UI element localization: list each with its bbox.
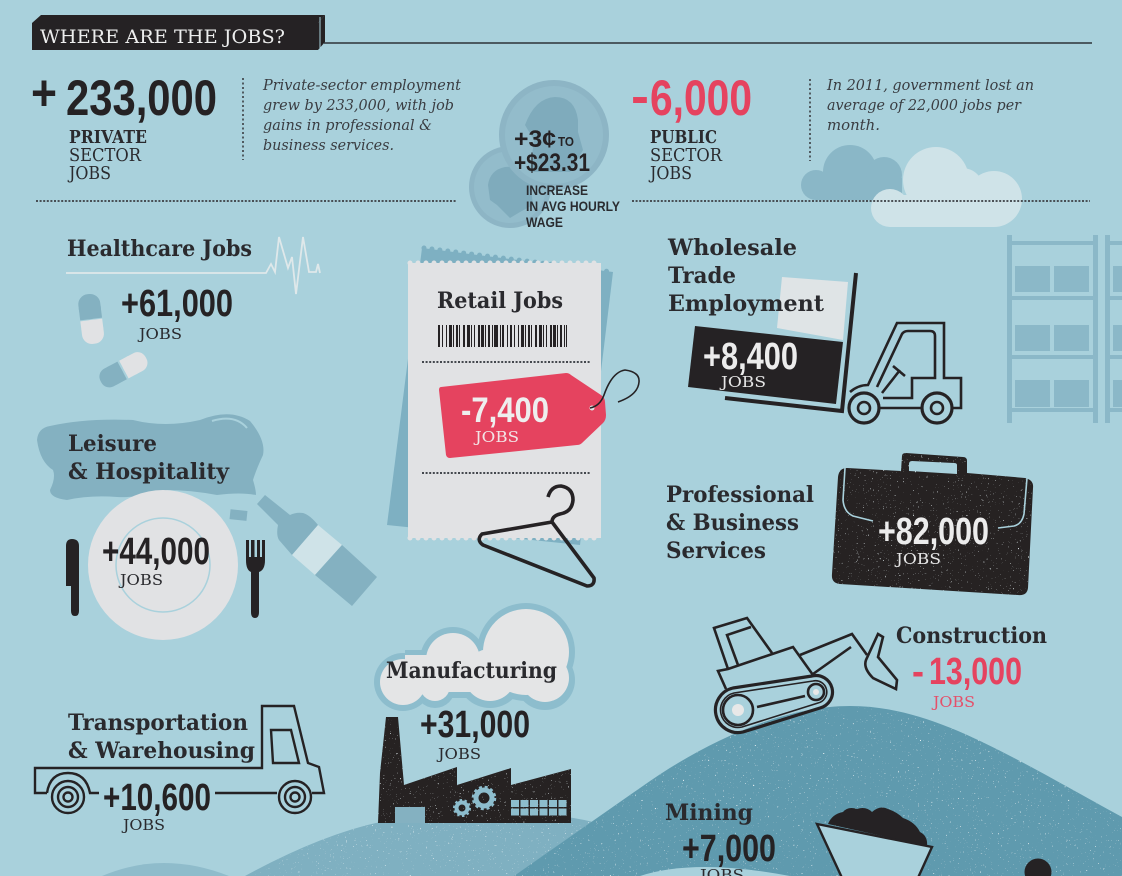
panel: leisure and hospitality [37, 414, 377, 640]
text: private sector description: gains in professional & [263, 118, 432, 134]
panel: retail: Retail Jobs [437, 288, 563, 314]
panel: professional and business services: Services [666, 538, 766, 564]
panel: mining: Mining [665, 800, 753, 826]
panel: wholesale trade: Employment [668, 291, 825, 317]
text: private sector description: grew by 233,000, with job [263, 98, 454, 114]
icon: light cloud [871, 147, 1022, 227]
panel: manufacturing: JOBS [436, 745, 481, 763]
panel: manufacturing [374, 603, 575, 823]
panel: transportation and warehousing: +10,600 [103, 777, 211, 819]
panel: manufacturing: +31,000 [420, 704, 530, 746]
icon: miner head [1024, 858, 1052, 876]
hill: light foreground [640, 867, 790, 876]
panel: construction: 13,000 [929, 651, 1022, 693]
title banner [32, 15, 325, 50]
text: public sector description: average of 22,000 jobs per [827, 98, 1022, 114]
text: private sector description: Private-sector employment [262, 78, 461, 94]
stat: private sector jobs: + [31, 65, 57, 121]
text: public sector description [826, 78, 1034, 134]
stat: public sector jobs [631, 68, 752, 184]
panel: wholesale trade: JOBS [719, 373, 766, 391]
panel: leisure and hospitality: & Hospitality [68, 459, 230, 485]
panel: healthcare [66, 236, 320, 391]
text: private sector description: business services. [263, 138, 394, 154]
icon: coins with wage increase: TO [558, 134, 574, 149]
icon: coins with wage increase: INCREASE [526, 182, 588, 198]
text: public sector description: month. [827, 118, 880, 134]
hill: small bottom left [102, 863, 229, 876]
panel: wholesale trade: Wholesale [667, 235, 797, 261]
panel: professional and business services: & Business [666, 510, 799, 536]
panel: mining: +7,000 [682, 828, 776, 870]
panel: construction: - [912, 651, 924, 693]
text: public sector description: In 2011, government lost an [826, 78, 1034, 94]
icon: coins with wage increase: +$23.31 [514, 149, 590, 177]
panel: retail: -7,400 [461, 391, 549, 430]
stat: public sector jobs: SECTOR [650, 146, 723, 166]
icon: coins with wage increase: IN AVG HOURLY [526, 198, 621, 214]
panel: transportation and warehousing: Transportation [68, 710, 248, 736]
stat: public sector jobs: PUBLIC [650, 128, 717, 148]
panel: leisure and hospitality: JOBS [118, 571, 163, 589]
panel: mining [665, 800, 932, 876]
panel: wholesale trade [667, 235, 961, 423]
panel: construction [714, 618, 1047, 733]
panel: transportation and warehousing: & Warehousing [68, 738, 255, 764]
panel: professional and business services: Professional [666, 482, 814, 508]
panel: professional and business services: +82,000 [878, 511, 989, 553]
panel: wholesale trade: +8,400 [703, 336, 798, 378]
panel: healthcare: Healthcare Jobs [67, 236, 252, 262]
stat: public sector jobs: - [631, 68, 649, 124]
panel: transportation and warehousing: JOBS [121, 816, 165, 834]
stat: private sector jobs: JOBS [67, 164, 111, 184]
title banner: WHERE ARE THE JOBS? [40, 26, 285, 48]
stat: private sector jobs: 233,000 [66, 70, 217, 126]
icon: coins with wage increase: WAGE [526, 214, 563, 230]
stat: private sector jobs: PRIVATE [69, 128, 147, 148]
icon: coins with wage increase: +3¢ [514, 126, 556, 153]
panel: leisure and hospitality: +44,000 [102, 531, 210, 573]
icon: dark cloud [801, 145, 902, 200]
panel: retail: JOBS [473, 428, 519, 446]
stat: public sector jobs: 6,000 [650, 70, 752, 126]
icon: coins with wage increase [469, 80, 621, 230]
panel: wholesale trade: Trade [668, 263, 736, 289]
panel: retail [387, 248, 639, 586]
hill: middle [245, 814, 700, 876]
panel: healthcare: JOBS [137, 325, 182, 343]
stat: public sector jobs: JOBS [648, 164, 692, 184]
text: private sector description [262, 78, 461, 154]
panel: leisure and hospitality: Leisure [68, 431, 157, 457]
panel: healthcare: +61,000 [121, 283, 233, 325]
stat: private sector jobs: SECTOR [69, 146, 142, 166]
hill: large [514, 706, 1122, 876]
panel: construction: JOBS [931, 693, 975, 711]
panel: construction: Construction [896, 623, 1047, 649]
icon: warehouse shelves [1007, 235, 1122, 423]
panel: professional and business services [666, 453, 1033, 595]
panel: manufacturing: Manufacturing [386, 658, 557, 684]
panel: professional and business services: JOBS [894, 550, 941, 568]
panel: transportation and warehousing [35, 706, 324, 834]
stat: private sector jobs [31, 65, 217, 184]
